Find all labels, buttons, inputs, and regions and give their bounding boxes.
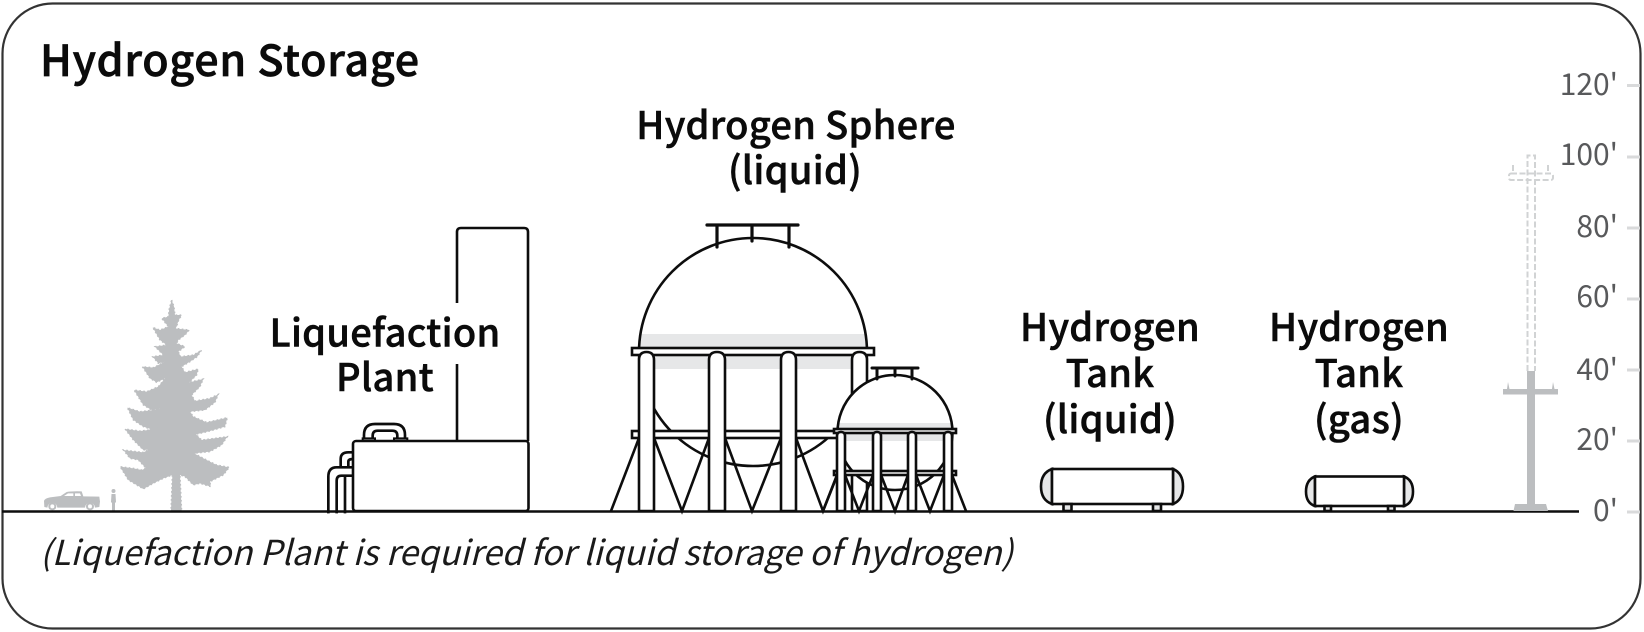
upper ring <box>834 429 956 433</box>
mid ring <box>834 471 956 475</box>
label: hydrogen tank gas: (gas) <box>1314 389 1404 444</box>
icon: person <box>111 489 116 510</box>
columns <box>639 352 654 511</box>
braces <box>823 475 966 511</box>
footnote: (Liquefaction Plant is required for liquid storage of hydrogen) <box>40 525 1014 575</box>
label: hydrogen sphere: (liquid) <box>728 140 862 195</box>
height scale: 0' <box>1593 486 1618 530</box>
braces <box>611 438 852 511</box>
label: hydrogen tank liquid: Hydrogen <box>1020 297 1200 352</box>
label: hydrogen tank liquid: (liquid) <box>1043 389 1177 444</box>
icon: pickup truck <box>44 491 100 510</box>
height scale: 80' <box>1576 202 1618 246</box>
height scale: 40' <box>1576 345 1618 389</box>
height scale: 60' <box>1576 272 1618 316</box>
height scale: 120' <box>1560 60 1618 104</box>
sphere <box>838 375 952 490</box>
label: hydrogen sphere <box>636 95 956 195</box>
top platform <box>707 225 798 247</box>
hydrogen tank liquid <box>1041 469 1183 511</box>
mid ring <box>632 431 872 438</box>
liquefaction plant <box>328 228 528 513</box>
label: hydrogen tank liquid <box>1020 297 1200 444</box>
height scale: 100' <box>1560 130 1618 174</box>
upper ring <box>632 348 874 355</box>
title: Hydrogen Storage <box>40 27 420 89</box>
label: hydrogen tank gas <box>1269 297 1449 444</box>
dashed extension <box>1509 156 1553 371</box>
plant building <box>353 441 528 511</box>
hydrogen tank gas <box>1306 476 1413 511</box>
label: liquefaction plant <box>269 302 501 402</box>
label: hydrogen tank liquid: Tank <box>1066 343 1154 398</box>
tower <box>457 228 528 441</box>
label: liquefaction plant: Liquefaction <box>269 302 501 358</box>
icon: tree <box>120 300 229 511</box>
label: liquefaction plant: Plant <box>336 347 434 402</box>
columns <box>837 432 845 511</box>
top platform <box>872 368 918 379</box>
pipes <box>328 424 407 513</box>
label: hydrogen tank gas: Hydrogen <box>1269 297 1449 352</box>
label: hydrogen sphere: Hydrogen Sphere <box>636 95 956 150</box>
ground line <box>2 510 1579 513</box>
solid pole <box>1503 371 1558 511</box>
sphere <box>639 238 867 466</box>
label: hydrogen tank gas: Tank <box>1315 343 1403 398</box>
height scale: 20' <box>1576 415 1618 459</box>
height scale <box>1560 60 1640 530</box>
small hydrogen sphere <box>823 368 966 511</box>
utility pole <box>1503 156 1558 511</box>
large hydrogen sphere <box>611 225 876 511</box>
